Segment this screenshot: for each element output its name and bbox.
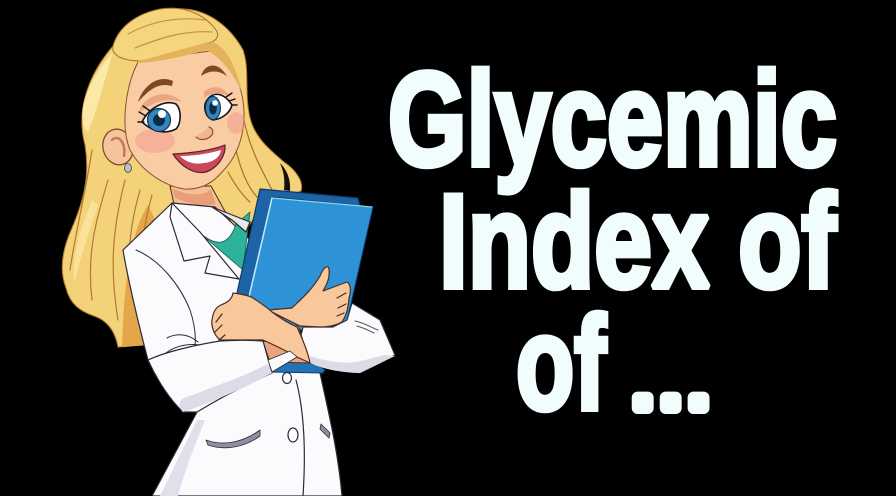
- eye shadow: [140, 87, 230, 112]
- right sleeve: [296, 303, 395, 373]
- blush: [135, 112, 245, 153]
- left eye: [138, 103, 180, 132]
- nose: [196, 127, 213, 139]
- pocket: [206, 430, 260, 448]
- illustration: doctor holding a blue folder: [62, 8, 395, 496]
- left sleeve over arm: [148, 340, 272, 412]
- title line 3: ...: [633, 345, 717, 423]
- right eye: [205, 93, 237, 120]
- hair: top swoop: [113, 8, 218, 61]
- crossed forearms and hands: [212, 267, 350, 363]
- title line 3: of: [516, 290, 606, 438]
- lab coat: [123, 203, 395, 496]
- coat front seam: [296, 380, 304, 496]
- neck: [170, 186, 232, 239]
- title: [388, 46, 837, 438]
- title line 3: [516, 290, 717, 438]
- hair: back and long waves: [62, 9, 302, 347]
- scrubs top: [201, 212, 250, 270]
- collar: [170, 203, 250, 279]
- ear and earring: [99, 126, 137, 172]
- mouth: [173, 145, 225, 173]
- face: [125, 50, 244, 189]
- blue folder: [237, 189, 373, 373]
- eyebrows: [138, 65, 227, 102]
- buttons: [282, 372, 292, 384]
